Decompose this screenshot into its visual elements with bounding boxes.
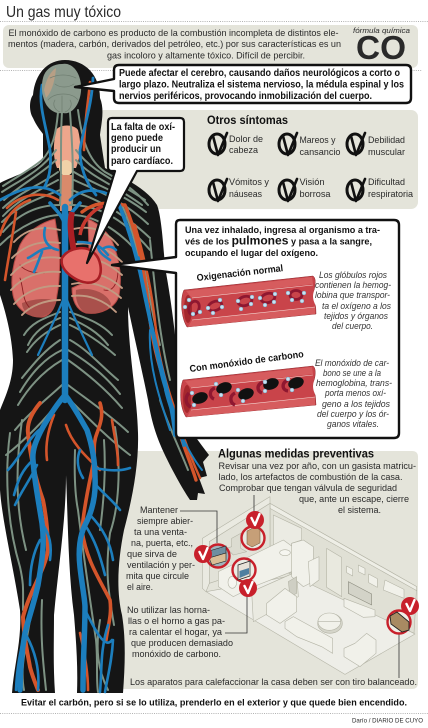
panel: symptoms background bbox=[96, 110, 418, 209]
intro text: mentos (madera, carbón, derivados del petróleo, etc.) por sus características es un bbox=[8, 39, 341, 49]
callout intro text: vés de los pulmones y pasa a la sangre, bbox=[185, 234, 372, 248]
text: annual inspection: que, ante un escape, cierre bbox=[299, 494, 409, 504]
text: ventilation advice: Mantener bbox=[140, 505, 178, 515]
callout: cardiac arrest: La falta de oxí- bbox=[111, 122, 175, 133]
symptom: headache: Dolor de bbox=[229, 134, 263, 144]
callout intro text: Una vez inhalado, ingresa al organismo a tra- bbox=[185, 224, 380, 235]
symptom: dizziness: cansancio bbox=[300, 147, 340, 157]
house illustration bbox=[202, 497, 417, 674]
symptom: blurred vision bbox=[279, 177, 331, 201]
text: ventilation advice: ventilación y per- bbox=[127, 560, 195, 570]
symptoms heading: Otros síntomas bbox=[207, 113, 288, 127]
floor and walls bbox=[202, 497, 417, 674]
text: carbon monoxide effect: geno a los tejidos bbox=[322, 399, 391, 409]
symptom: dizziness bbox=[279, 133, 340, 157]
intro text: El monóxido de carbono es producto de la combustión incompleta de distintos ele- bbox=[8, 28, 338, 38]
credit: Darío / DIARIO DE CUYO bbox=[352, 718, 423, 724]
callout intro text bbox=[185, 224, 380, 258]
footer advice: Evitar el carbón, pero si se lo utiliza, prenderlo en el exterior y que quede bien encendido. bbox=[21, 698, 407, 708]
text: carbon monoxide effect: ganos vitales. bbox=[327, 419, 379, 429]
callout: cardiac arrest: geno puede bbox=[111, 133, 164, 144]
text: normal oxygenation: del cuerpo. bbox=[332, 321, 373, 331]
text: carbon monoxide effect: El monóxido de car- bbox=[315, 358, 389, 368]
body silhouette bbox=[0, 60, 209, 693]
text: carbon monoxide effect: hemoglobina, trans- bbox=[316, 378, 392, 388]
text: annual inspection: lado, los artefactos de combustión de la casa. bbox=[218, 472, 402, 482]
symptom: vomiting: náuseas bbox=[229, 189, 262, 199]
text: carbon monoxide effect bbox=[315, 358, 392, 429]
label: normal oxygenation: Oxigenación normal bbox=[196, 263, 284, 284]
symptom: breathing difficulty: respiratoria bbox=[368, 189, 414, 199]
veins bbox=[0, 78, 202, 692]
symptom: muscle weakness bbox=[347, 133, 405, 157]
symptom: breathing difficulty: Dificultad bbox=[368, 177, 405, 187]
heading: preventive measures: Algunas medidas preventivas bbox=[218, 446, 374, 460]
panel: blood oxygen callout bbox=[112, 220, 399, 438]
symptom: blurred vision: borrosa bbox=[300, 189, 331, 199]
callout: brain effects: Puede afectar el cerebro, causando daños neurológicos a corto o bbox=[119, 68, 400, 79]
callout: brain effects: nervios periféricos, provocando inmobilización del cuerpo. bbox=[119, 91, 372, 102]
callout: cardiac arrest: producir un bbox=[111, 144, 161, 155]
text: carbon monoxide effect: bono se une a la bbox=[323, 368, 381, 378]
text: ventilation advice: el aire. bbox=[127, 582, 153, 592]
title: Un gas muy tóxico bbox=[6, 4, 121, 21]
callout: cardiac arrest: paro cardíaco. bbox=[111, 156, 173, 167]
callout: brain effects: largo plazo. Neutraliza el sistema nervioso, la médula espinal y los bbox=[119, 80, 404, 90]
lungs bbox=[12, 219, 120, 317]
marker: heater bbox=[388, 597, 419, 634]
callout: brain effects bbox=[75, 65, 411, 103]
arteries bbox=[0, 82, 200, 690]
text: ventilation advice: que sirva de bbox=[127, 549, 177, 559]
text: stove warning: monóxido de carbono. bbox=[132, 649, 221, 659]
symptom: headache: cabeza bbox=[229, 145, 259, 155]
throat and trachea bbox=[54, 126, 80, 211]
marker: water heater bbox=[242, 511, 264, 550]
text: carbon monoxide effect: del cuerpo y los ór- bbox=[317, 409, 389, 419]
text: normal oxygenation: ta el oxígeno a los bbox=[322, 301, 392, 311]
text: ventilation advice: ta una venta- bbox=[134, 527, 187, 537]
symptom: breathing difficulty bbox=[347, 177, 414, 201]
symptom: dizziness: Mareos y bbox=[300, 135, 336, 145]
text: stove warning: que producen demasiado bbox=[131, 638, 233, 648]
blood vessel: carbon monoxide bbox=[181, 366, 316, 417]
panel: other symptoms bbox=[207, 113, 414, 201]
text: stove warning: No utilizar las horna- bbox=[127, 605, 210, 615]
nerves bbox=[0, 110, 188, 692]
symptom: headache bbox=[209, 133, 263, 155]
symptom: vomiting bbox=[209, 177, 269, 201]
living room furniture bbox=[267, 565, 404, 667]
text: stove warning: ra calentar el hogar, ya bbox=[129, 627, 223, 637]
text: carbon monoxide effect: porta menos oxí- bbox=[324, 388, 386, 398]
symptom: vomiting: Vómitos y bbox=[229, 177, 269, 187]
symptom: muscle weakness: muscular bbox=[368, 147, 405, 157]
kitchen furniture bbox=[218, 515, 342, 597]
text: stove warning bbox=[127, 605, 233, 659]
panel: prevention background bbox=[118, 451, 418, 689]
symptom: muscle weakness: Debilidad bbox=[368, 135, 405, 145]
symptom: blurred vision: Visión bbox=[300, 177, 324, 187]
panel: introduction bbox=[3, 25, 418, 68]
text: balanced flue heaters: Los aparatos para calefaccionar la casa deben ser con tiro balanceado. bbox=[130, 677, 417, 687]
chemical formula: CO bbox=[356, 29, 406, 66]
callout: cardiac arrest bbox=[87, 118, 184, 263]
text: annual inspection: Revisar una vez por año, con un gasista matricu- bbox=[218, 461, 416, 471]
text: normal oxygenation: tejidos y órganos bbox=[324, 311, 389, 321]
text: annual inspection bbox=[218, 461, 416, 515]
blood vessel: normal bbox=[182, 276, 316, 327]
text: annual inspection: el sistema. bbox=[338, 505, 381, 515]
text: normal oxygenation: lobina que transpor- bbox=[315, 290, 390, 300]
text: stove warning: llas o el horno a gas pa- bbox=[128, 616, 225, 626]
callout intro text: ocupando el lugar del oxígeno. bbox=[185, 247, 318, 258]
marker: oven bbox=[232, 558, 257, 597]
text: annual inspection: Comprobar que tengan válvula de seguridad bbox=[219, 483, 397, 493]
text: ventilation advice bbox=[126, 505, 195, 592]
text: ventilation advice: siempre abier- bbox=[137, 516, 193, 526]
heart bbox=[62, 206, 103, 283]
intro text: gas incoloro y altamente tóxico. Difícil de percibir. bbox=[107, 50, 305, 60]
leader lines bbox=[180, 495, 399, 678]
text: normal oxygenation bbox=[315, 270, 392, 331]
brain bbox=[42, 64, 81, 113]
text: normal oxygenation: Los glóbulos rojos bbox=[319, 270, 388, 280]
human body illustration bbox=[0, 60, 209, 693]
chemical formula: fórmula química bbox=[353, 26, 410, 35]
text: ventilation advice: na, puerta, etc., bbox=[131, 538, 193, 548]
marker: window bbox=[194, 544, 230, 568]
text: normal oxygenation: contienen la hemog- bbox=[315, 280, 391, 290]
text: ventilation advice: mita que circule bbox=[126, 571, 189, 581]
intro text bbox=[8, 28, 341, 60]
label: with carbon monoxide: Con monóxido de carbono bbox=[189, 349, 305, 375]
